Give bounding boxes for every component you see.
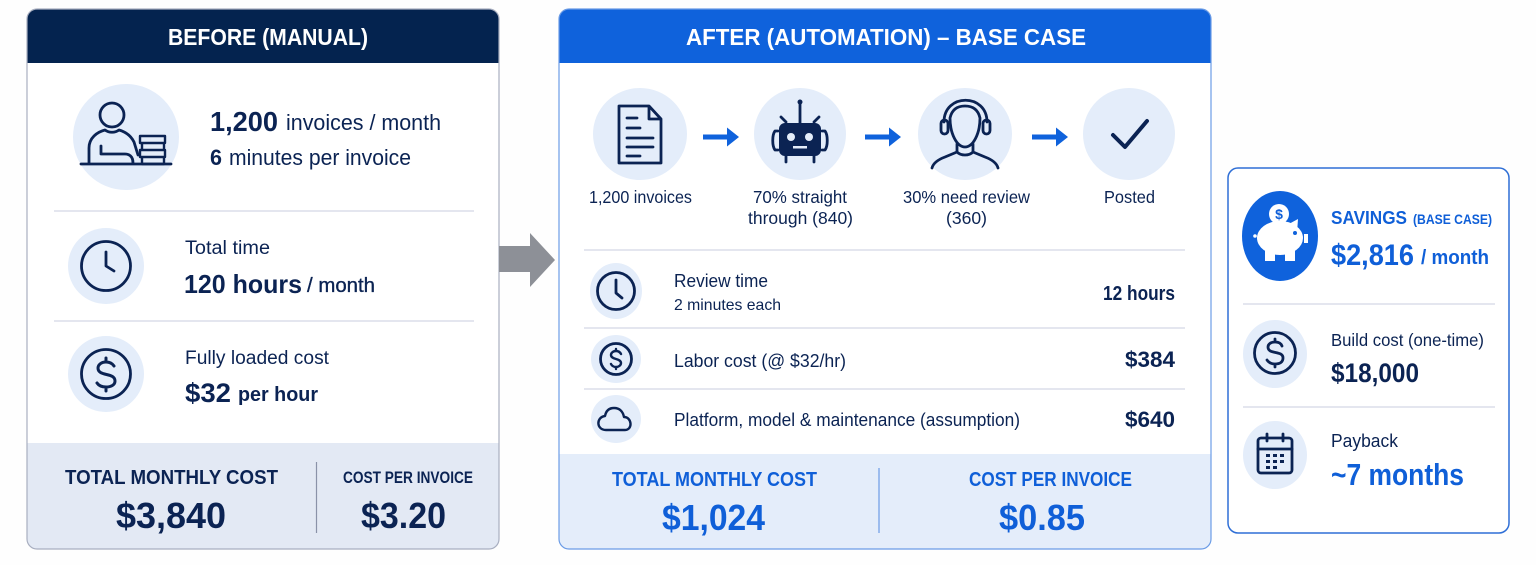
text: build cost bbox=[1331, 330, 1484, 388]
text: savings: / month bbox=[1421, 247, 1489, 269]
summary band: before totals: TOTAL MONTHLY COST bbox=[65, 467, 278, 489]
summary band: before totals bbox=[27, 443, 499, 549]
row: labor cost: Labor cost (@ $32/hr) bbox=[674, 351, 846, 371]
row: labor cost: $384 bbox=[1125, 347, 1176, 372]
text: savings: SAVINGS bbox=[1331, 208, 1407, 228]
arrow: before to after bbox=[499, 233, 555, 287]
text: fully loaded cost: Fully loaded cost bbox=[185, 348, 330, 369]
summary band: after totals: TOTAL MONTHLY COST bbox=[612, 469, 817, 491]
text: total time: Total time bbox=[185, 238, 270, 259]
text: savings: $2,816 bbox=[1331, 239, 1414, 272]
icon: build cost dollar bbox=[1243, 320, 1307, 388]
row: review time: 12 hours bbox=[1103, 283, 1175, 305]
flow labels: (360) bbox=[946, 208, 987, 228]
text: build cost: Build cost (one-time) bbox=[1331, 330, 1484, 350]
text: invoice volume: 6 bbox=[210, 145, 222, 170]
text: payback: Payback bbox=[1331, 431, 1399, 451]
text: total time bbox=[184, 238, 375, 299]
icon: piggy bank bbox=[1242, 191, 1318, 281]
summary band: before totals: COST PER INVOICE bbox=[343, 468, 473, 487]
text: payback bbox=[1331, 431, 1464, 492]
summary band: after totals bbox=[559, 454, 1211, 549]
flow labels bbox=[589, 187, 1155, 228]
summary band: before totals: $3,840 bbox=[116, 495, 226, 536]
icon: reviewer with headset bbox=[918, 88, 1012, 180]
text: invoice volume: invoices / month bbox=[286, 110, 441, 135]
icon: person at desk with invoice stack bbox=[73, 84, 179, 190]
row: review time: Review time bbox=[674, 271, 768, 291]
row: review time bbox=[590, 263, 1175, 319]
flow labels: 1,200 invoices bbox=[589, 187, 692, 207]
row: platform, model and maintenance: Platform, model & maintenance (assumption) bbox=[674, 410, 1020, 430]
text: payback: ~7 months bbox=[1331, 457, 1464, 492]
row: review time: 2 minutes each bbox=[674, 297, 781, 314]
icon: document bbox=[593, 88, 687, 180]
text: fully loaded cost bbox=[185, 348, 330, 408]
icon: dollar coin bbox=[68, 336, 144, 412]
header: before (manual): BEFORE (MANUAL) bbox=[168, 24, 368, 50]
text: savings: (BASE CASE) bbox=[1413, 211, 1492, 227]
flow labels: Posted bbox=[1104, 187, 1155, 207]
arrow: flow 2 bbox=[865, 128, 901, 146]
arrow: flow 3 bbox=[1032, 128, 1068, 146]
summary band: after totals: $0.85 bbox=[999, 497, 1085, 538]
icon: check mark bbox=[1083, 88, 1175, 180]
panel: after (automation) base case bbox=[559, 9, 1211, 549]
icon: clock bbox=[68, 228, 144, 304]
text: invoice volume bbox=[210, 106, 441, 170]
header: before (manual) bbox=[27, 9, 499, 63]
summary band: before totals: $3.20 bbox=[361, 495, 446, 536]
row: platform, model and maintenance bbox=[591, 395, 1175, 443]
icon: robot bbox=[754, 88, 846, 180]
icon: piggy bank: $ bbox=[1275, 206, 1283, 222]
flow labels: through (840) bbox=[748, 208, 853, 228]
text: build cost: $18,000 bbox=[1331, 358, 1419, 388]
text: invoice volume: 1,200 bbox=[210, 106, 278, 137]
flow labels: 30% need review bbox=[903, 187, 1030, 207]
summary band: after totals: $1,024 bbox=[662, 497, 765, 538]
row: labor cost bbox=[591, 335, 1176, 383]
text: fully loaded cost: $32 bbox=[185, 378, 231, 408]
icon: calendar bbox=[1243, 421, 1307, 489]
text: invoice volume: minutes per invoice bbox=[229, 145, 411, 170]
text: fully loaded cost: per hour bbox=[238, 384, 318, 406]
row: platform, model and maintenance: $640 bbox=[1125, 407, 1175, 432]
text: total time: / month bbox=[307, 275, 375, 297]
header: after (automation): AFTER (AUTOMATION) – BASE CASE bbox=[686, 24, 1086, 50]
arrow: flow 1 bbox=[703, 128, 739, 146]
summary band: after totals: COST PER INVOICE bbox=[969, 469, 1132, 491]
text: total time: 120 hours bbox=[184, 269, 302, 299]
panel: before (manual) bbox=[27, 9, 499, 549]
text: savings bbox=[1331, 208, 1492, 272]
panel: savings summary bbox=[1228, 168, 1509, 533]
header: after (automation) bbox=[559, 9, 1211, 63]
flow labels: 70% straight bbox=[753, 187, 847, 207]
